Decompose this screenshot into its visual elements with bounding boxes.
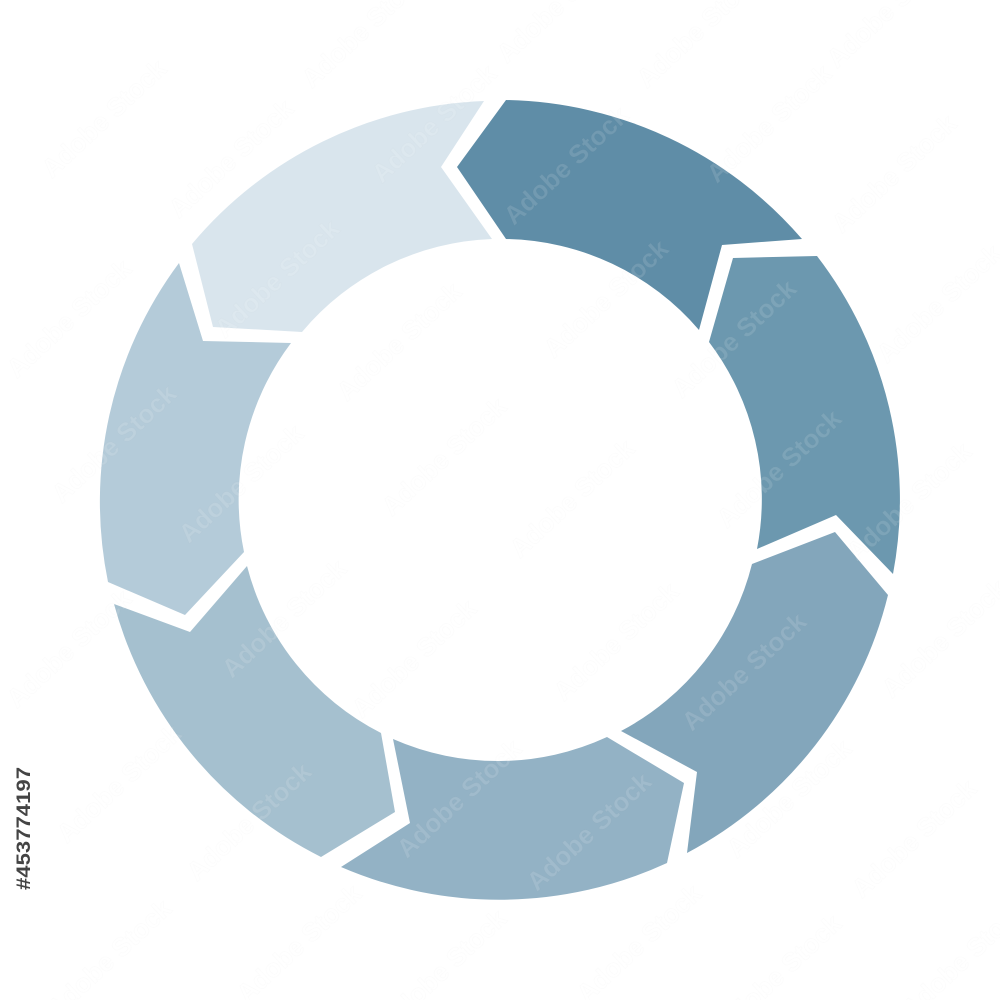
watermark pattern: Adobe Stock [173, 418, 310, 549]
watermark pattern: Adobe Stock [209, 213, 346, 344]
watermark pattern: Adobe Stock [331, 276, 468, 407]
watermark pattern: Adobe Stock [181, 756, 318, 887]
watermark pattern: Adobe Stock [376, 391, 513, 522]
watermark pattern: Adobe Stock [163, 93, 300, 224]
watermark pattern: Adobe Stock [841, 436, 978, 567]
segment 7: top left arrow [192, 101, 492, 332]
watermark pattern: Adobe Stock [366, 58, 503, 189]
watermark pattern: Adobe Stock [538, 233, 675, 364]
watermark pattern: Adobe Stock [721, 733, 858, 864]
segment 3: lower right arrow [621, 532, 888, 853]
segment 1: top right arrow [457, 100, 802, 330]
watermark pattern: Adobe Stock [346, 593, 483, 724]
watermark pattern: Adobe Stock [46, 378, 183, 509]
watermark pattern: Adobe Stock [676, 606, 813, 737]
stock image id label: #453774197 [14, 767, 35, 890]
circular arrow cycle [100, 100, 900, 900]
watermark pattern: Adobe Stock [846, 773, 983, 904]
watermark pattern: Adobe Stock [711, 403, 848, 534]
watermark pattern: Adobe Stock [216, 553, 353, 684]
segment 6: left arrow [100, 263, 291, 615]
watermark pattern: Adobe Stock [504, 433, 641, 564]
watermark pattern: Adobe Stock [1, 583, 138, 714]
segment 4: bottom arrow [341, 737, 684, 900]
segment 2: right arrow [709, 256, 900, 574]
watermark pattern: Adobe Stock [701, 58, 838, 189]
watermark pattern: Adobe Stock [391, 733, 528, 864]
watermark pattern: Adobe Stock [51, 718, 188, 849]
watermark pattern: Adobe Stock [548, 576, 685, 707]
watermark pattern: Adobe Stock [521, 766, 658, 897]
segment 5: lower left arrow [114, 566, 395, 857]
watermark pattern: Adobe Stock [498, 100, 635, 231]
watermark pattern: Adobe Stock [36, 53, 173, 184]
watermark pattern: Adobe Stock [1, 253, 138, 384]
watermark pattern: Adobe Stock [826, 108, 963, 239]
watermark pattern: Adobe Stock [666, 273, 803, 404]
